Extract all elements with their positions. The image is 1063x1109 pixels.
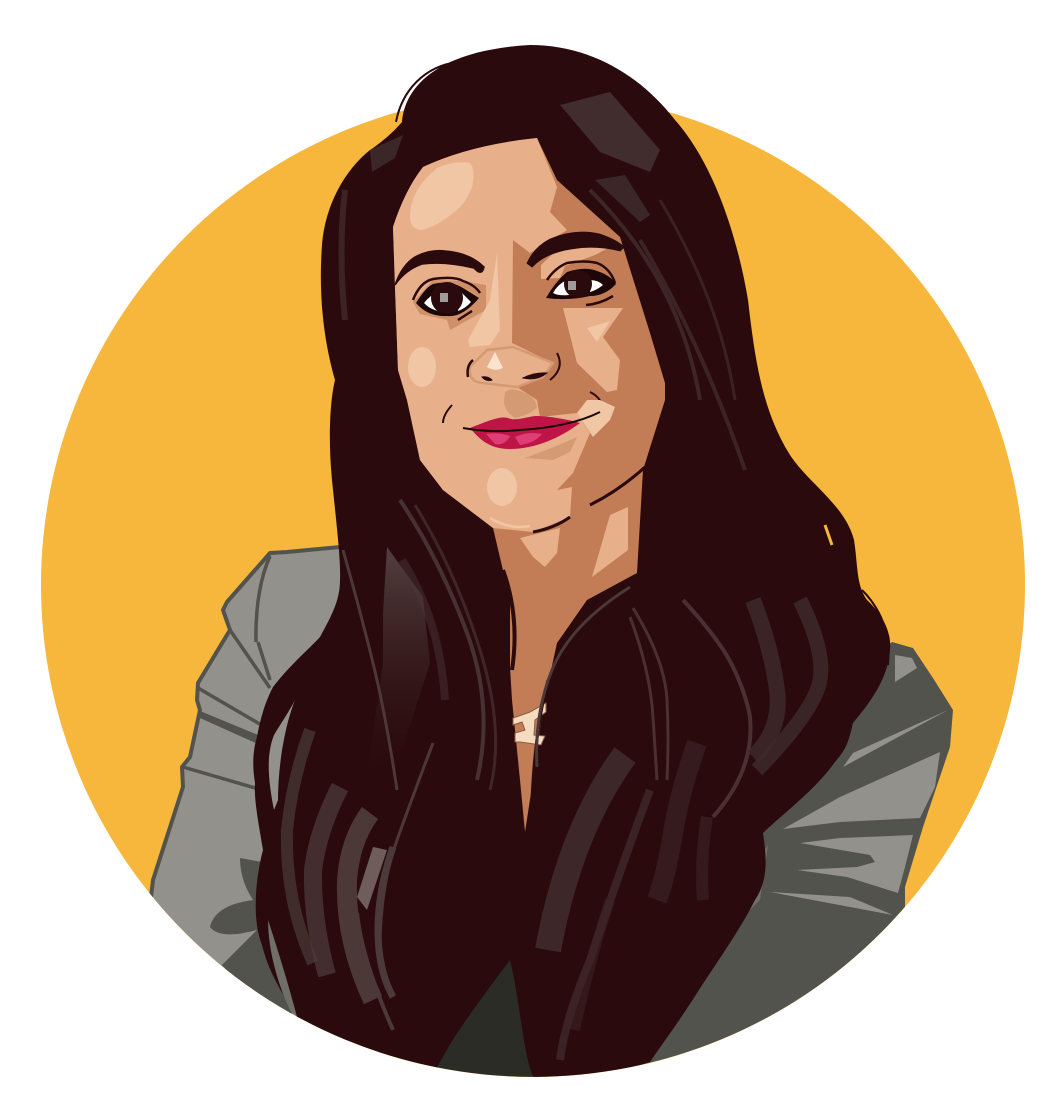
- neck highlights: [520, 507, 628, 577]
- smile lines: [443, 353, 605, 423]
- jaw and neck lines: [533, 467, 645, 532]
- left eye shadow: [413, 280, 486, 330]
- outer right wisps: [862, 590, 888, 665]
- hair strands: [287, 190, 888, 1060]
- cheek crease highlight: [577, 400, 615, 437]
- gaps in left hair: [269, 700, 295, 810]
- hair silhouette: [253, 45, 890, 1078]
- flyaway hair line: [396, 62, 458, 122]
- crown strands: [590, 190, 700, 400]
- face and neck: [393, 138, 665, 832]
- hair highlight patches: [357, 92, 660, 910]
- jacket: [130, 45, 953, 1109]
- left eyebrow: [395, 251, 484, 285]
- necklace: [513, 703, 546, 745]
- left cheek highlight: [408, 347, 436, 387]
- right cheek highlight: [587, 321, 610, 342]
- skin base: [393, 138, 665, 832]
- chin rim light: [490, 518, 530, 527]
- chin highlight: [487, 468, 517, 506]
- jacket: right shoulder: [600, 642, 953, 1100]
- right eyebrow: [528, 233, 623, 266]
- inner dark top: [436, 960, 540, 1077]
- center and right hair strands: [548, 755, 625, 950]
- right eye: [546, 262, 616, 305]
- lips: [463, 412, 600, 449]
- right cheek light patch: [563, 308, 623, 392]
- jacket: left shoulder: [150, 545, 422, 1064]
- right brow light area: [541, 245, 610, 279]
- left eye: [413, 278, 480, 320]
- forehead highlight: [410, 162, 474, 230]
- nose highlights: [468, 253, 500, 347]
- light skin area: [393, 138, 590, 532]
- left hair strands: [343, 550, 397, 790]
- lip shadow: [525, 437, 577, 460]
- neck hair lines: [503, 570, 515, 670]
- nose: [468, 347, 553, 418]
